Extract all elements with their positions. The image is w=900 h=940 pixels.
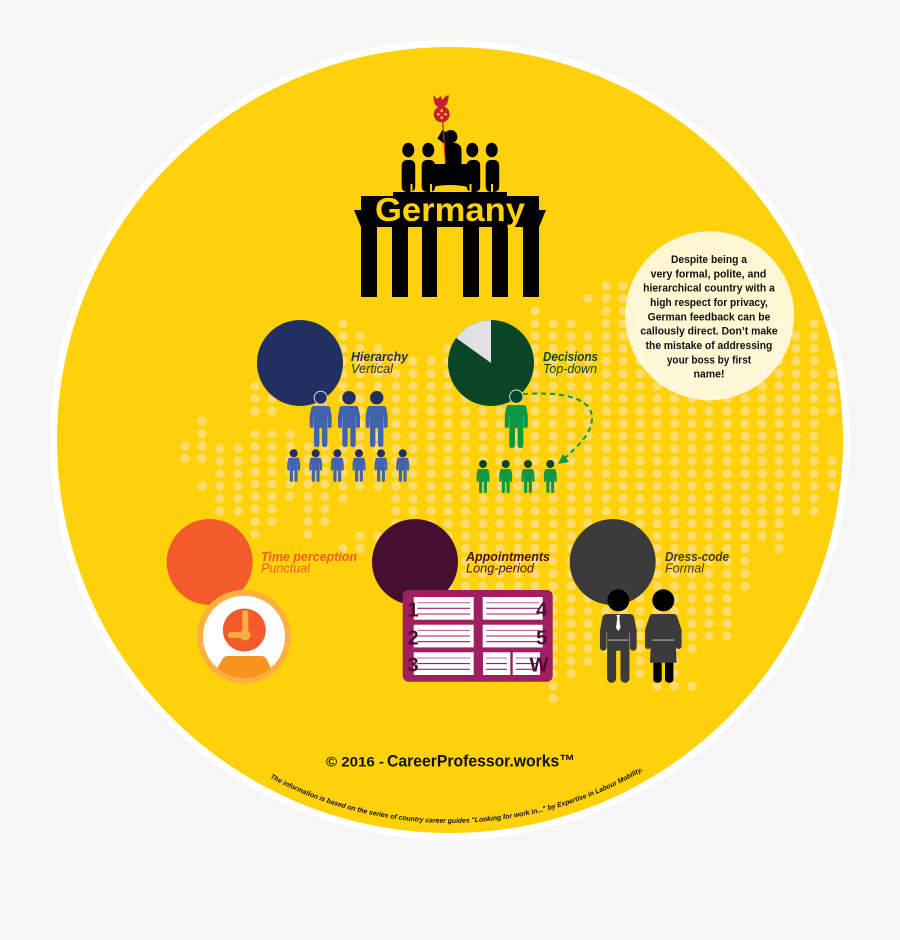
icon: calendar: 3 xyxy=(407,655,419,677)
dashed arrow xyxy=(523,393,592,464)
small green people xyxy=(477,460,557,493)
icon: woman in skirt xyxy=(645,589,682,683)
hierarchy label: Vertical xyxy=(351,362,394,376)
title: Germany xyxy=(375,191,526,228)
callout text: callously direct. Don’t make xyxy=(640,326,778,338)
gate structure xyxy=(354,192,546,297)
dress-code label: Dress-code xyxy=(665,550,729,564)
dress-code circle xyxy=(570,519,656,605)
small blue people xyxy=(287,449,409,482)
time label: Punctual xyxy=(261,562,311,576)
dress-code label xyxy=(665,550,729,576)
callout bubble xyxy=(625,231,794,400)
panel: hierarchy xyxy=(257,320,409,482)
curved source note: The information is based on the series of country career guides "Looking for work in..." by Expertise in Labour Mobility. xyxy=(271,768,643,824)
appointments label: Long-period xyxy=(466,562,535,576)
yellow disc xyxy=(57,47,843,833)
flag pole xyxy=(443,122,446,163)
callout text: name! xyxy=(694,369,724,381)
time label: Time perception xyxy=(261,550,357,564)
flag emblem xyxy=(433,95,450,122)
dress-code label: Formal xyxy=(665,562,705,576)
copyright line: © 2016 - xyxy=(326,754,384,770)
appointments label xyxy=(465,550,550,576)
copyright line: CareerProfessor.works™ xyxy=(387,752,575,771)
callout text: your boss by first xyxy=(667,354,751,366)
panel: appointments xyxy=(372,519,553,682)
decisions pie chart xyxy=(448,320,534,406)
icon: calendar xyxy=(403,590,553,682)
dotted world map xyxy=(185,286,832,699)
callout text: Despite being a xyxy=(671,254,748,266)
large green person xyxy=(505,390,528,448)
appointments label: Appointments xyxy=(465,550,550,564)
decisions label: Top-down xyxy=(543,362,597,376)
decisions label xyxy=(543,350,598,376)
time label xyxy=(261,550,357,576)
hierarchy label xyxy=(351,350,409,376)
hierarchy label: Hierarchy xyxy=(351,350,409,364)
icon: calendar: 2 xyxy=(407,627,419,649)
icon: man in suit xyxy=(600,589,637,683)
horses and rider xyxy=(402,130,499,192)
icon: calendar: 4 xyxy=(536,600,548,622)
large blue people xyxy=(310,391,388,447)
icon: Brandenburg Gate with quadriga xyxy=(354,95,546,297)
panel: decisions xyxy=(448,320,598,493)
white ring xyxy=(50,40,850,840)
panel: dress-code xyxy=(570,519,729,683)
callout text: the mistake of addressing xyxy=(646,340,772,352)
callout text xyxy=(640,254,778,381)
icon: calendar: 5 xyxy=(536,627,547,649)
callout text: German feedback can be xyxy=(648,311,770,323)
icon: clock badge xyxy=(197,590,291,684)
hierarchy circle xyxy=(257,320,343,406)
callout text: high respect for privacy, xyxy=(650,297,768,309)
icon: calendar: W xyxy=(530,655,549,677)
time circle xyxy=(167,519,253,605)
icon: calendar: 1 xyxy=(407,600,419,622)
appointments circle xyxy=(372,519,458,605)
callout text: very formal, polite, and xyxy=(651,268,766,280)
panel: time perception xyxy=(167,519,357,684)
decisions label: Decisions xyxy=(543,350,598,364)
callout text: hierarchical country with a xyxy=(643,283,776,295)
